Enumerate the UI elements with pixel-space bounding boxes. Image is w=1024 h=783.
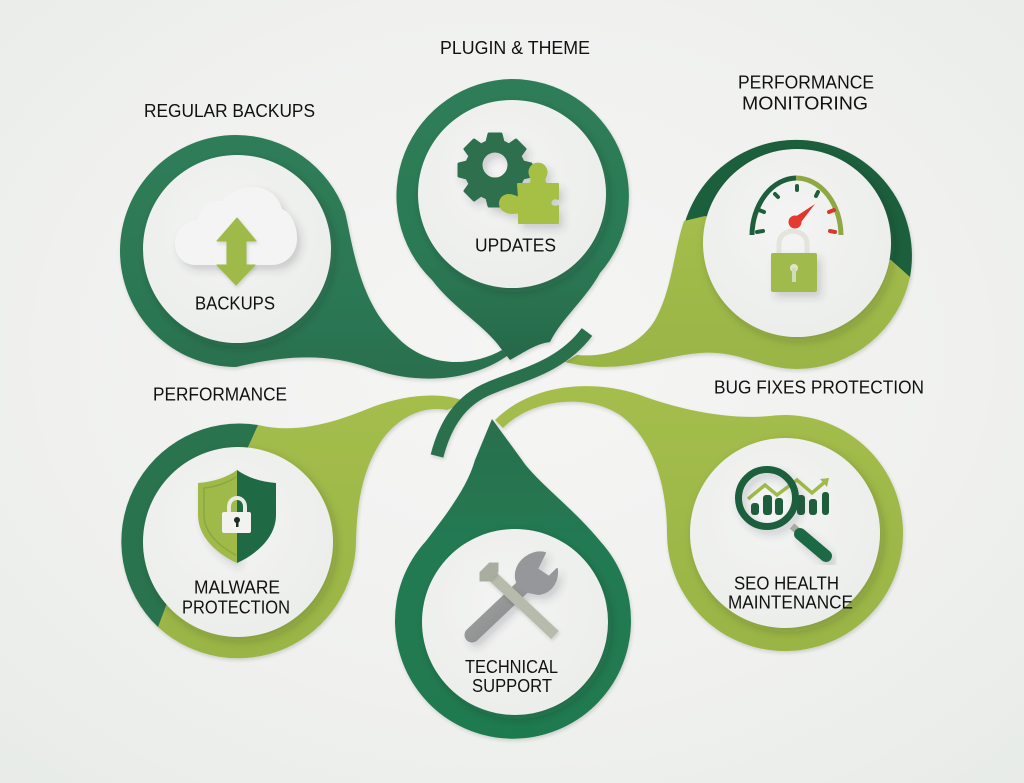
panel: technical support — [395, 419, 631, 739]
heading: performance monitoring — [738, 72, 874, 114]
icon: gear and puzzle piece — [459, 134, 558, 223]
white disc: malware — [143, 447, 333, 637]
label: seo health maintenance: MAINTENANCE — [728, 592, 853, 612]
label: updates: UPDATES — [475, 236, 556, 256]
label: technical support: TECHNICAL — [465, 657, 558, 677]
pin shape: malware — [158, 395, 467, 658]
heading: performance: PERFORMANCE — [153, 384, 287, 404]
icon: cloud with arrows — [175, 187, 297, 285]
pin shape: support — [395, 419, 631, 739]
panel: malware protection — [121, 395, 467, 658]
label: seo health maintenance: SEO HEALTH — [734, 574, 839, 594]
label: backups: BACKUPS — [195, 294, 275, 314]
heading: performance monitoring: PERFORMANCE — [738, 72, 874, 92]
heading: bug fixes protection: BUG FIXES PROTECTION — [714, 378, 924, 398]
label: technical support: SUPPORT — [472, 676, 552, 696]
label: malware protection: MALWARE — [194, 578, 280, 598]
icon: shield with padlock — [198, 470, 276, 563]
pin shape: monitoring — [565, 216, 910, 369]
ring: dark top — [685, 140, 912, 277]
pin shape: seo — [495, 386, 903, 651]
panel: regular backups — [120, 135, 507, 379]
white disc: seo — [690, 438, 880, 628]
panel: performance monitoring — [565, 140, 912, 369]
icon: magnifier over chart — [738, 470, 829, 556]
label: technical support — [465, 657, 558, 696]
connector: central dark strip — [437, 332, 587, 456]
panel: plugin and theme updates — [396, 79, 629, 360]
icon: wrench and hammer — [472, 552, 557, 635]
white disc: support — [422, 529, 608, 715]
ring: dark left — [121, 424, 258, 627]
white disc: monitoring — [703, 149, 891, 337]
label: malware protection — [182, 578, 290, 618]
icon: gauge and padlock — [752, 178, 841, 292]
heading: performance monitoring: MONITORING — [742, 94, 868, 114]
pin shape: backups — [120, 135, 507, 379]
white disc: updates — [418, 100, 606, 288]
label: seo health maintenance — [728, 574, 853, 612]
pin shape: updates — [396, 79, 629, 360]
panel: seo health maintenance — [495, 386, 903, 651]
white disc: backups — [143, 155, 331, 343]
label: malware protection: PROTECTION — [182, 598, 290, 618]
heading: plugin and theme: PLUGIN & THEME — [440, 38, 590, 58]
heading: regular backups: REGULAR BACKUPS — [144, 101, 315, 121]
